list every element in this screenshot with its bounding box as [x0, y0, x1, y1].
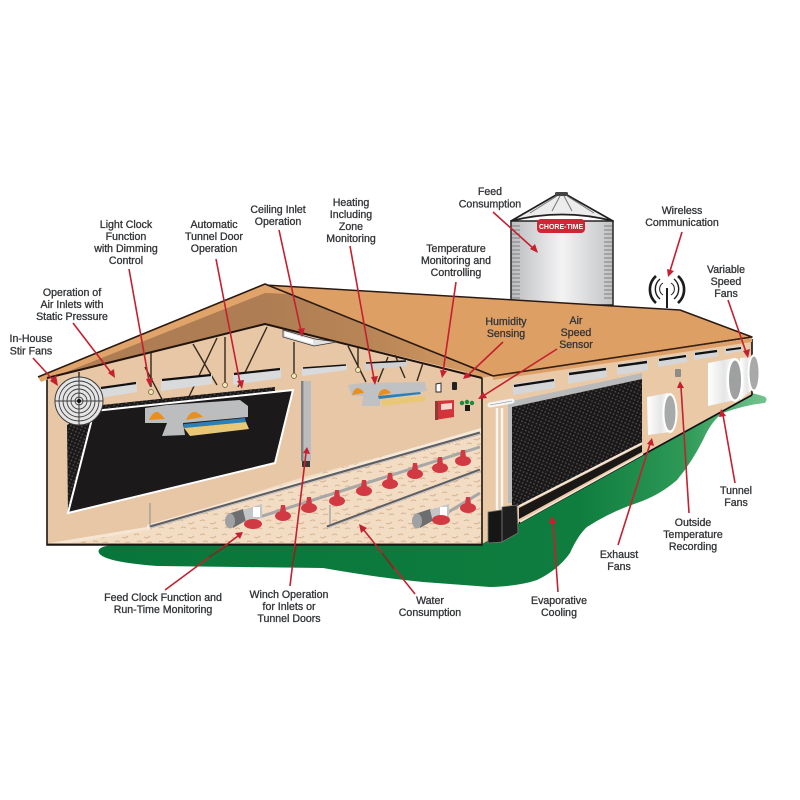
label: automatic tunnel door: Automatic [190, 219, 238, 231]
main roof [265, 285, 752, 376]
label: temperature: Temperature [426, 243, 486, 255]
feed silo [511, 192, 613, 305]
gable roof underside [38, 284, 493, 382]
label: outside temperature: Outside [675, 517, 711, 529]
feed motor left [225, 504, 262, 529]
label: light clock: Light Clock [100, 219, 152, 231]
label: automatic tunnel door: Tunnel Door [185, 231, 243, 243]
arrowheads [50, 244, 750, 539]
label: tunnel fans: Tunnel [720, 485, 752, 497]
heater burners [352, 388, 391, 396]
label: heating: Including [330, 209, 372, 221]
label: wireless: Wireless [662, 205, 702, 217]
label: outside temperature: Recording [669, 541, 717, 553]
tunnel fans [708, 354, 760, 406]
label: automatic tunnel door: Operation [191, 243, 237, 255]
label: evaporative cooling: Cooling [541, 607, 577, 619]
tunnel door [67, 387, 293, 513]
outside temperature sensor [675, 369, 681, 377]
label: operation of air inlets: Operation of [43, 287, 101, 299]
label: variable speed fans: Speed [711, 276, 741, 288]
label: air speed: Sensor [559, 339, 593, 351]
trusses [79, 327, 423, 405]
icon: wireless antenna [650, 276, 684, 308]
green lawn [99, 393, 767, 587]
label: light clock: Control [109, 255, 143, 267]
water lines [150, 433, 480, 528]
control panel [435, 400, 454, 420]
label: exhaust fans: Fans [607, 561, 631, 573]
label: feed consumption: Feed [478, 186, 502, 198]
end wall air inlets [100, 360, 407, 398]
silo body [511, 221, 613, 305]
side wall air inlets [513, 346, 742, 395]
silo ribs [512, 226, 612, 298]
exhaust fan [647, 393, 678, 435]
evaporative cooling pad [490, 373, 643, 522]
light bulbs [148, 368, 360, 394]
label: feed clock: Run-Time Monitoring [114, 604, 212, 616]
label: ceiling inlet: Operation [255, 216, 301, 228]
label: winch operation: Winch Operation [250, 589, 328, 601]
heater stripes [378, 392, 421, 399]
stir fan [55, 377, 103, 425]
heater stripes [184, 418, 246, 428]
heater left [145, 400, 249, 436]
right side wall [482, 337, 752, 544]
label: temperature: Controlling [431, 267, 481, 279]
ceiling inlet [283, 330, 337, 346]
end wall interior [47, 324, 482, 545]
feeders [275, 450, 476, 521]
label: in-house stir fans: In-House [10, 333, 52, 345]
label: humidity: Humidity [485, 316, 527, 328]
floor litter [47, 428, 482, 544]
label: winch operation: Tunnel Doors [257, 613, 321, 625]
callout arrows [33, 212, 746, 594]
label: heating: Heating [333, 197, 369, 209]
cooling pipes [490, 401, 512, 405]
feed lines [250, 447, 480, 520]
heater burners [149, 412, 203, 420]
heater right [348, 382, 427, 406]
label: heating: Monitoring [326, 233, 376, 245]
label: feed clock: Feed Clock Function and [104, 592, 222, 604]
air speed sensor [460, 400, 474, 411]
label: water consumption: Water [416, 595, 444, 607]
arrow shafts over lawn [209, 545, 394, 569]
label: in-house stir fans: Stir Fans [10, 346, 52, 358]
label: evaporative cooling: Evaporative [531, 595, 587, 607]
label: variable speed fans: Fans [714, 288, 738, 300]
pump box [488, 505, 518, 543]
label: air speed: Speed [561, 327, 591, 339]
label: temperature: Monitoring and [421, 255, 491, 267]
label: tunnel fans: Fans [724, 497, 748, 509]
label: outside temperature: Temperature [663, 529, 723, 541]
label: light clock: with Dimming [93, 243, 158, 255]
label: feed consumption: Consumption [459, 198, 521, 210]
label: light clock: Function [106, 231, 146, 243]
label: winch operation: for Inlets or [262, 601, 316, 613]
label: variable speed fans: Variable [707, 264, 745, 276]
silo logo: CHORE-TIME [539, 224, 583, 231]
silo cone roof [511, 192, 613, 221]
winch tube [301, 381, 311, 467]
label: air speed: Air [570, 315, 582, 327]
label: humidity: Sensing [487, 328, 525, 340]
label: operation of air inlets: Static Pressure [36, 311, 108, 323]
label: heating: Zone [339, 221, 363, 233]
label: water consumption: Consumption [399, 607, 461, 619]
label: operation of air inlets: Air Inlets with [40, 299, 104, 311]
label: wireless: Communication [645, 217, 719, 229]
sensors [436, 382, 457, 392]
label: ceiling inlet: Ceiling Inlet [250, 204, 306, 216]
label: exhaust fans: Exhaust [600, 549, 638, 561]
feed motor right [412, 504, 450, 528]
